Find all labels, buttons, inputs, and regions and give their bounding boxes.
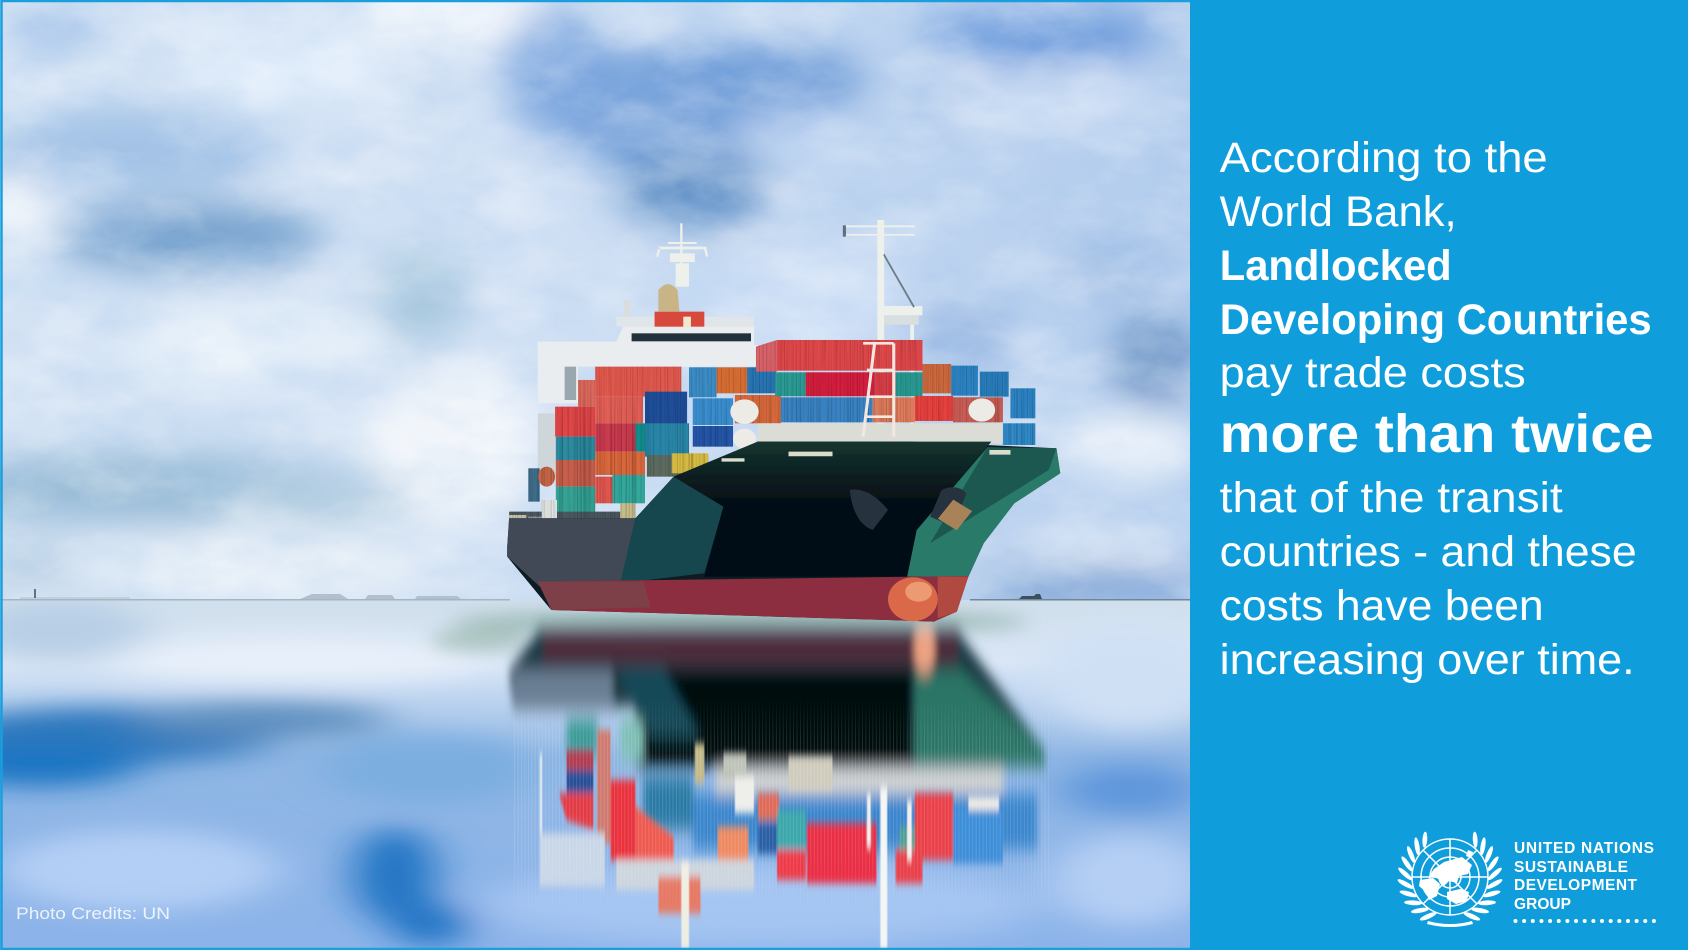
water with cloud reflections <box>0 600 1220 950</box>
text block: main message: Developing Countries <box>1220 296 1652 344</box>
logo text: United Nations Sustainable Development Group: SUSTAINABLE <box>1514 859 1628 876</box>
hull <box>507 442 1060 622</box>
logo text: United Nations Sustainable Development Group: UNITED NATIONS <box>1514 840 1654 857</box>
text block: main message: costs have been <box>1220 582 1544 630</box>
text block: main message: World Bank, <box>1220 188 1457 236</box>
container ship <box>507 220 1060 622</box>
text block: main message: countries - and these <box>1220 528 1637 576</box>
logo text: United Nations Sustainable Development Group <box>1514 840 1654 913</box>
text block: main message <box>1220 134 1654 684</box>
horizon with distant land <box>0 589 1190 600</box>
laurel wreath <box>1397 832 1503 927</box>
masts <box>656 220 922 440</box>
superstructure <box>538 284 758 480</box>
sky with clouds <box>0 0 1210 603</box>
photo: container ship at sea <box>0 0 1220 950</box>
logo text: United Nations Sustainable Development Group: DEVELOPMENT <box>1514 877 1638 894</box>
continents <box>1419 850 1473 904</box>
text block: main message: Landlocked <box>1220 242 1452 290</box>
dotted line under the logo text <box>1516 919 1654 923</box>
globe grid <box>1412 839 1488 915</box>
text block: main message: more than twice <box>1220 404 1654 464</box>
stacked containers <box>509 340 1035 543</box>
greenish water shadow under ship <box>430 612 1030 650</box>
text block: main message: increasing over time. <box>1220 636 1635 684</box>
panel: blue message panel <box>1190 0 1688 950</box>
ladder frame <box>863 343 894 437</box>
logo text: United Nations Sustainable Development Group: GROUP <box>1514 896 1571 913</box>
text block: main message: pay trade costs <box>1220 349 1526 397</box>
icon: UN emblem <box>1397 832 1503 927</box>
text block: main message: that of the transit <box>1220 474 1563 522</box>
white tank containers <box>730 398 995 449</box>
white deck block <box>758 423 1003 443</box>
ship reflection in the water <box>509 627 1049 950</box>
frame around the image <box>2 1 1190 949</box>
photo credit: Photo Credits: UN <box>16 904 170 923</box>
text block: main message: According to the <box>1220 134 1548 182</box>
